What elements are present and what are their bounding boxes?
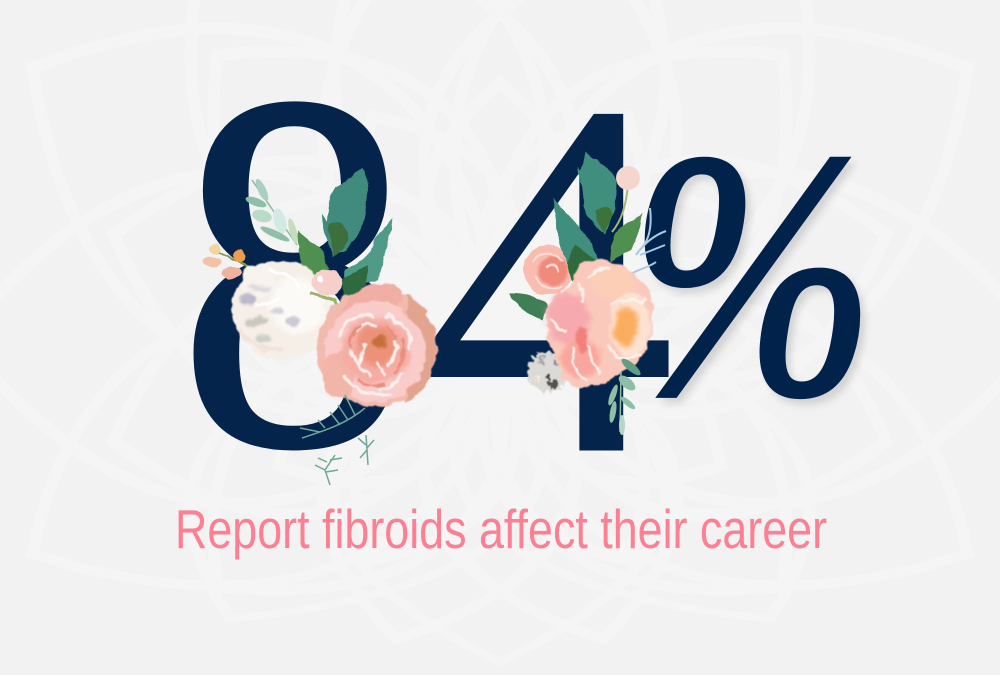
dark leaf xyxy=(341,265,368,303)
leaf shadow base xyxy=(329,222,349,257)
leaves of the 8 bouquet xyxy=(298,167,392,303)
lower sprigs xyxy=(300,395,374,485)
big figure: 84% xyxy=(178,0,875,561)
pale bud and stem xyxy=(612,166,640,232)
pink bud xyxy=(310,269,342,312)
green leaf right xyxy=(610,212,642,262)
peach peony xyxy=(545,260,653,387)
leaves of the 4 bouquet xyxy=(509,152,642,320)
teal leaf shadow xyxy=(596,207,612,233)
teal leaf lower shadow xyxy=(567,245,598,282)
slanted teal leaf xyxy=(343,218,392,297)
floral bouquet on the 8 xyxy=(203,167,437,485)
large teal leaf xyxy=(322,167,368,257)
floral bouquet on the 4 xyxy=(509,152,666,435)
percent sign: % xyxy=(630,80,875,468)
blue sprig xyxy=(628,208,666,276)
teal leaf lower xyxy=(553,197,600,272)
big pink rose xyxy=(317,283,437,407)
grey flower xyxy=(528,352,568,392)
teal leaf top xyxy=(578,152,616,235)
digit 4: 4 xyxy=(421,0,676,561)
digit 8: 8 xyxy=(178,0,412,554)
sprig upper left xyxy=(244,177,300,245)
lower sprig xyxy=(606,356,643,435)
caption: Report fibroids affect their career xyxy=(175,498,827,560)
green leaf xyxy=(298,230,329,278)
dark leaf left xyxy=(509,293,548,320)
small coral rose xyxy=(523,245,573,295)
white peony xyxy=(231,261,331,359)
orange blossom sprig xyxy=(203,244,256,279)
